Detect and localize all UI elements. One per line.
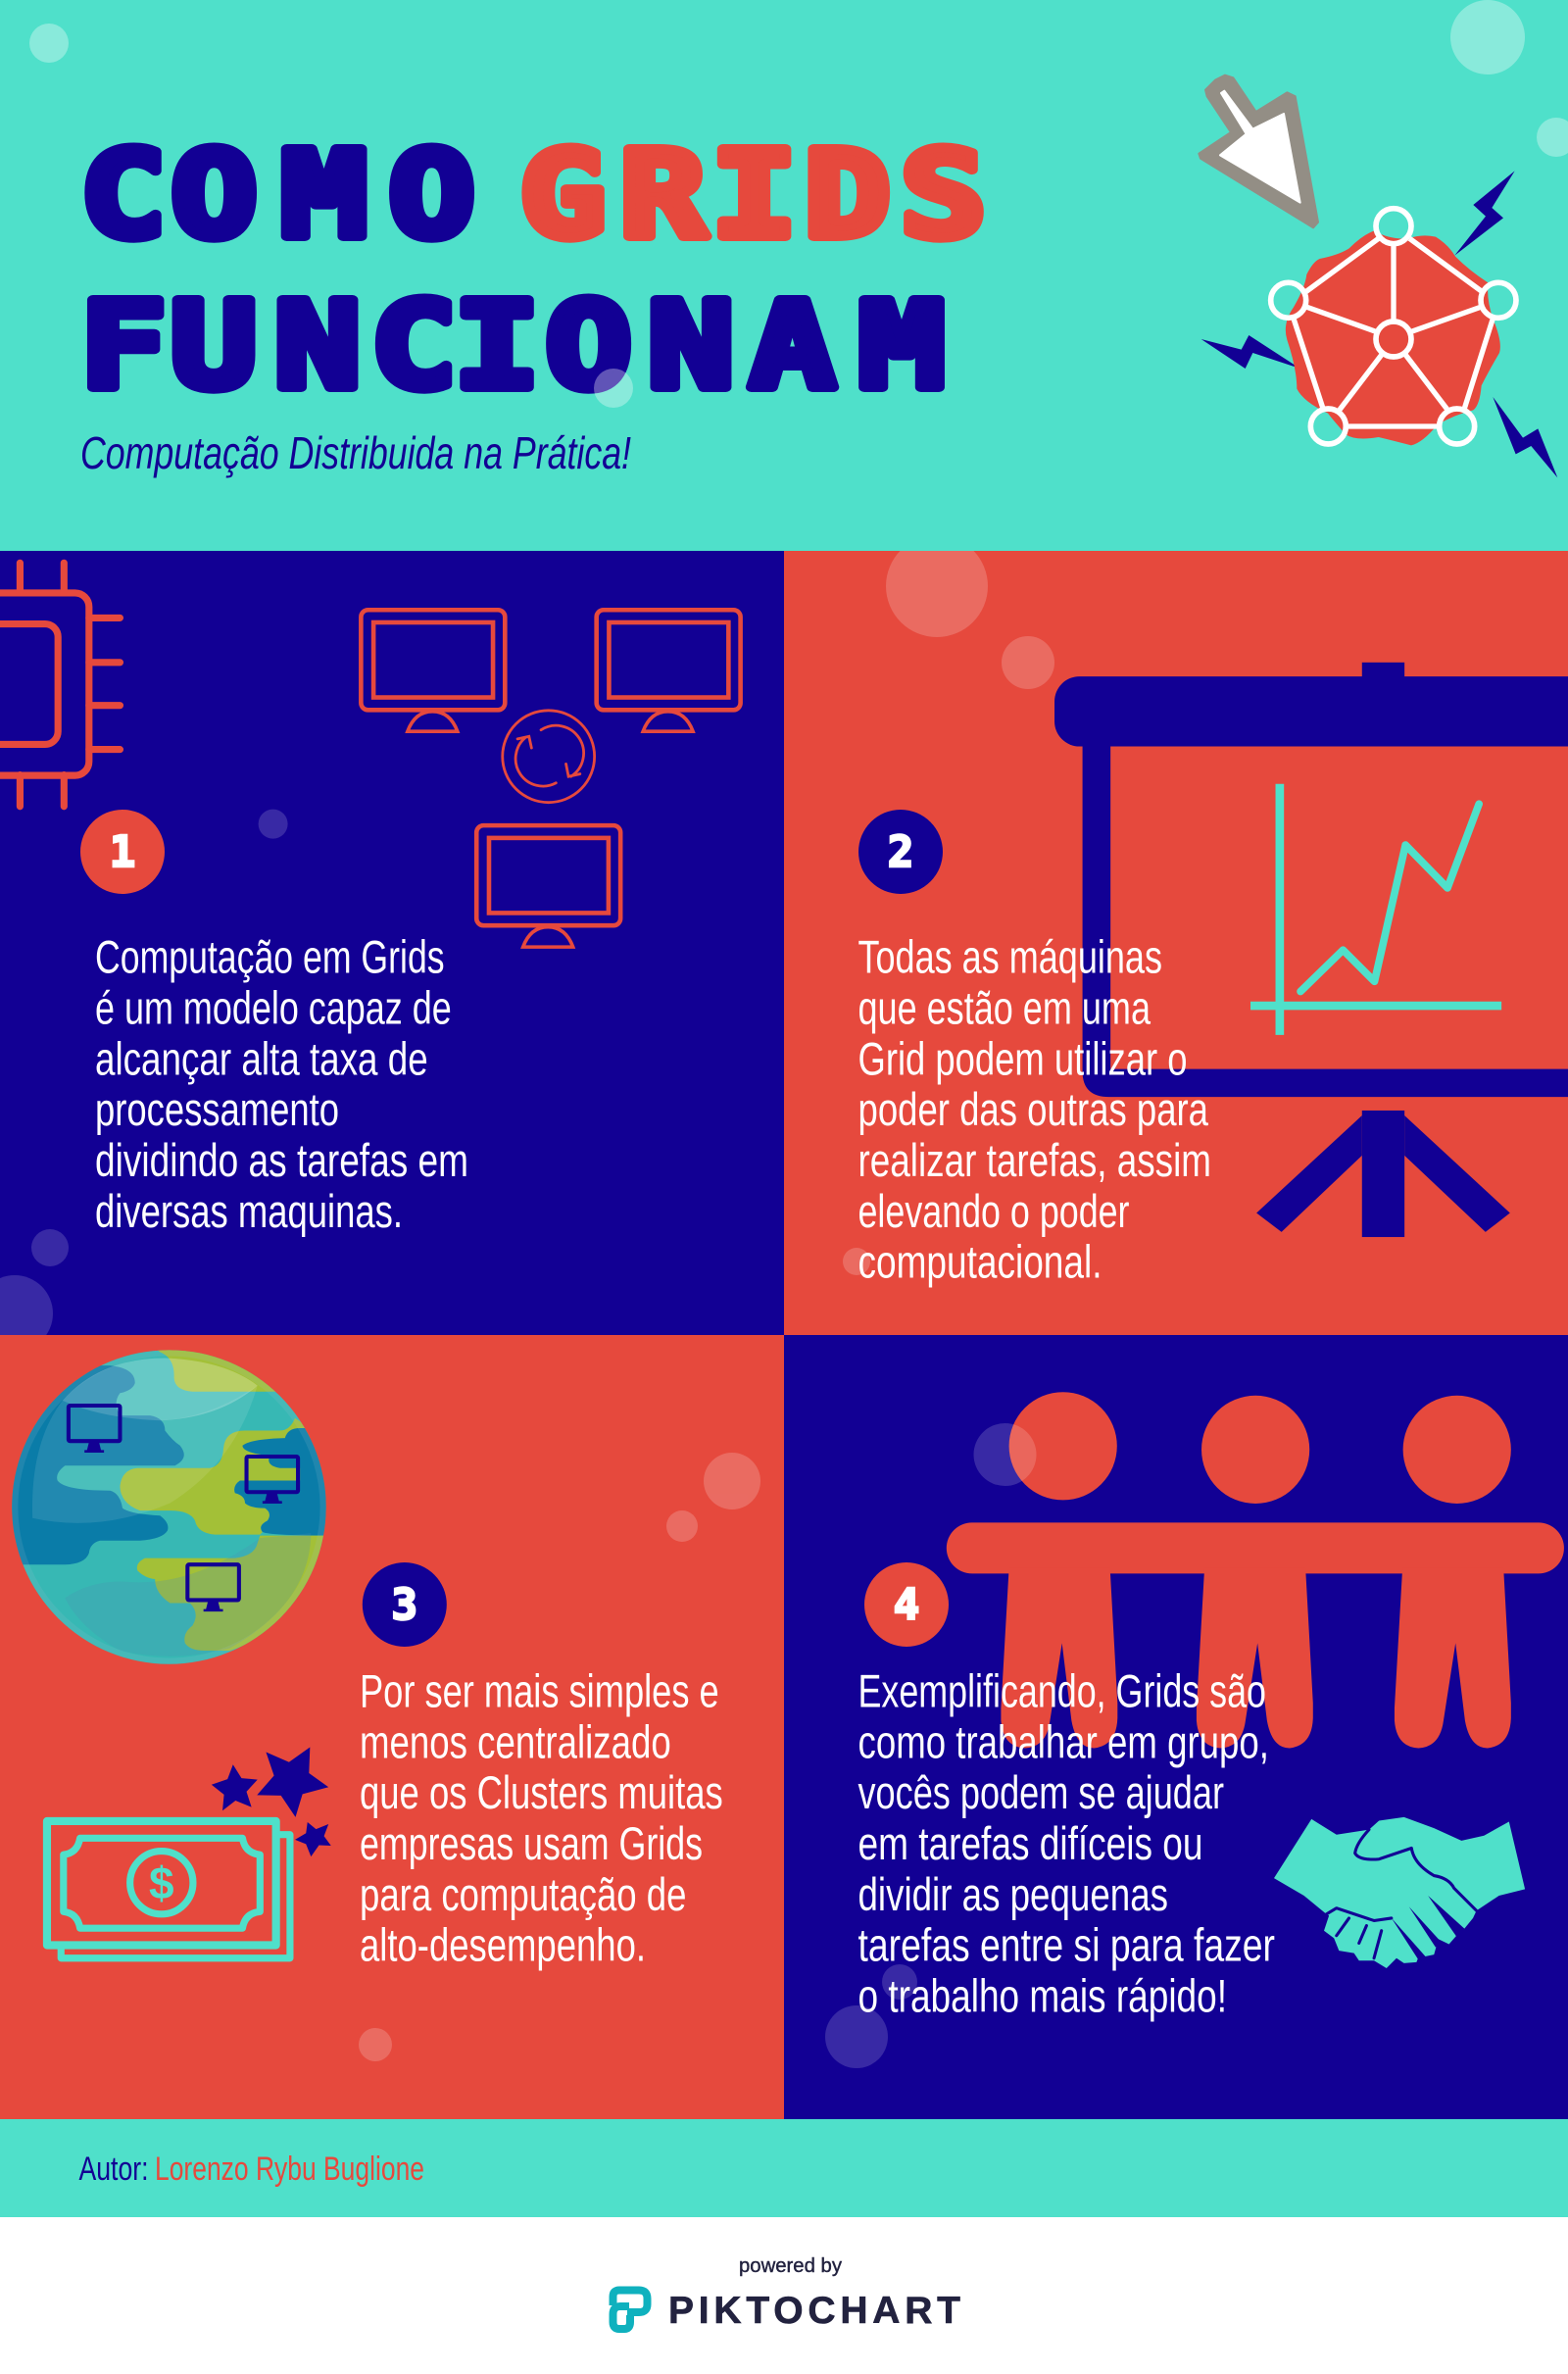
author credit: Autor: bbox=[78, 2151, 149, 2188]
text block 3: que os Clusters muitas bbox=[360, 1766, 723, 1818]
text block 3: Por ser mais simples e bbox=[360, 1665, 719, 1717]
text block 3 bbox=[360, 1665, 723, 1971]
panel: step 3 bbox=[0, 1335, 784, 2119]
icon: lightning bolts bbox=[1201, 171, 1557, 477]
panel: step 1 bbox=[0, 551, 784, 1352]
text block 4: tarefas entre si para fazer bbox=[858, 1919, 1275, 1971]
text block 1 bbox=[95, 931, 468, 1237]
badge 2: 2 bbox=[888, 827, 913, 877]
title: GRIDS bbox=[519, 125, 987, 265]
title bubble bbox=[594, 369, 633, 408]
text block 1: Computação em Grids bbox=[95, 931, 445, 983]
subtitle: Computação Distribuida na Prática! bbox=[80, 427, 631, 478]
panel: author footer bbox=[0, 2119, 1568, 2217]
icon: money bill and stars: $ bbox=[149, 1857, 174, 1908]
board bbox=[1054, 663, 1568, 1237]
panel 3 bubbles bbox=[359, 1453, 760, 2061]
text block 2: computacional. bbox=[858, 1236, 1102, 1288]
icon: piktochart logo bbox=[613, 2290, 647, 2329]
text block 1: dividindo as tarefas em bbox=[95, 1134, 468, 1186]
badge 3 bbox=[363, 1562, 447, 1647]
line chart bbox=[1250, 784, 1501, 1035]
globe monitors bbox=[69, 1406, 298, 1600]
badge 4: 4 bbox=[894, 1580, 919, 1630]
icon: three people holding arms bbox=[947, 1392, 1564, 1748]
text block 2: elevando o poder bbox=[858, 1185, 1129, 1237]
icon: globe with monitors bbox=[12, 1350, 326, 1664]
badge 4 bbox=[864, 1562, 949, 1647]
text block 2: Todas as máquinas bbox=[858, 931, 1162, 983]
icon: presentation board with chart bbox=[1054, 663, 1568, 1237]
text block 1: é um modelo capaz de bbox=[95, 982, 452, 1034]
title: COMO bbox=[79, 125, 475, 265]
panel 4 bubbles bbox=[825, 1423, 1037, 2068]
text block 1: processamento bbox=[95, 1083, 339, 1135]
icon: money bill and stars bbox=[47, 1747, 331, 1958]
text block 2: que estão em uma bbox=[858, 982, 1152, 1034]
title: FUNCIONAM bbox=[80, 276, 945, 416]
monitor bottom bbox=[476, 825, 620, 947]
panel: piktochart branding bbox=[0, 2217, 1568, 2374]
text block 4: o trabalho mais rápido! bbox=[858, 1969, 1227, 2021]
author credit bbox=[78, 2151, 424, 2188]
text block 4: dividir as pequenas bbox=[858, 1868, 1168, 1920]
text block 3: alto-desempenho. bbox=[360, 1919, 646, 1971]
monitor right bbox=[597, 610, 741, 731]
piktochart wordmark: PIKTOCHART bbox=[668, 2290, 960, 2332]
text block 1: alcançar alta taxa de bbox=[95, 1032, 428, 1084]
text block 2: poder das outras para bbox=[858, 1083, 1209, 1135]
badge 1: 1 bbox=[110, 827, 135, 877]
text block 4: em tarefas difíceis ou bbox=[858, 1817, 1203, 1869]
powered by: powered by bbox=[739, 2255, 842, 2277]
icon: cpu chip bbox=[0, 563, 120, 807]
icon: handshake bbox=[1274, 1817, 1525, 1968]
text block 1: diversas maquinas. bbox=[95, 1185, 403, 1237]
text block 3: para computação de bbox=[360, 1868, 686, 1920]
badge 2 bbox=[858, 810, 943, 894]
text block 2 bbox=[858, 931, 1211, 1288]
icon: cursor arrow bbox=[1199, 75, 1318, 227]
badge 1 bbox=[80, 810, 165, 894]
panel 2 bubbles bbox=[843, 535, 1054, 1275]
text block 4 bbox=[858, 1665, 1275, 2021]
panel: step 4 bbox=[784, 1335, 1568, 2119]
text block 3: empresas usam Grids bbox=[360, 1817, 703, 1869]
text block 4: vocês podem se ajudar bbox=[858, 1766, 1224, 1818]
text block 4: Exemplificando, Grids são bbox=[858, 1665, 1266, 1717]
monitor left bbox=[361, 610, 505, 731]
stars bbox=[212, 1747, 331, 1856]
panel 1 bubbles bbox=[0, 810, 288, 1352]
sync symbol bbox=[503, 711, 595, 803]
icon: three monitors and sync bbox=[361, 610, 741, 947]
text block 4: como trabalhar em grupo, bbox=[858, 1715, 1269, 1767]
panel: header bbox=[0, 0, 1568, 551]
author credit: Lorenzo Rybu Buglione bbox=[155, 2151, 424, 2188]
header bubbles bbox=[29, 0, 1568, 157]
badge 3: 3 bbox=[392, 1580, 417, 1630]
panel: step 2 bbox=[784, 535, 1568, 1335]
icon: network pentagon bbox=[1271, 209, 1516, 445]
text block 3: menos centralizado bbox=[360, 1715, 671, 1767]
text block 2: Grid podem utilizar o bbox=[858, 1032, 1188, 1084]
text block 2: realizar tarefas, assim bbox=[858, 1134, 1211, 1186]
title bbox=[79, 125, 987, 416]
